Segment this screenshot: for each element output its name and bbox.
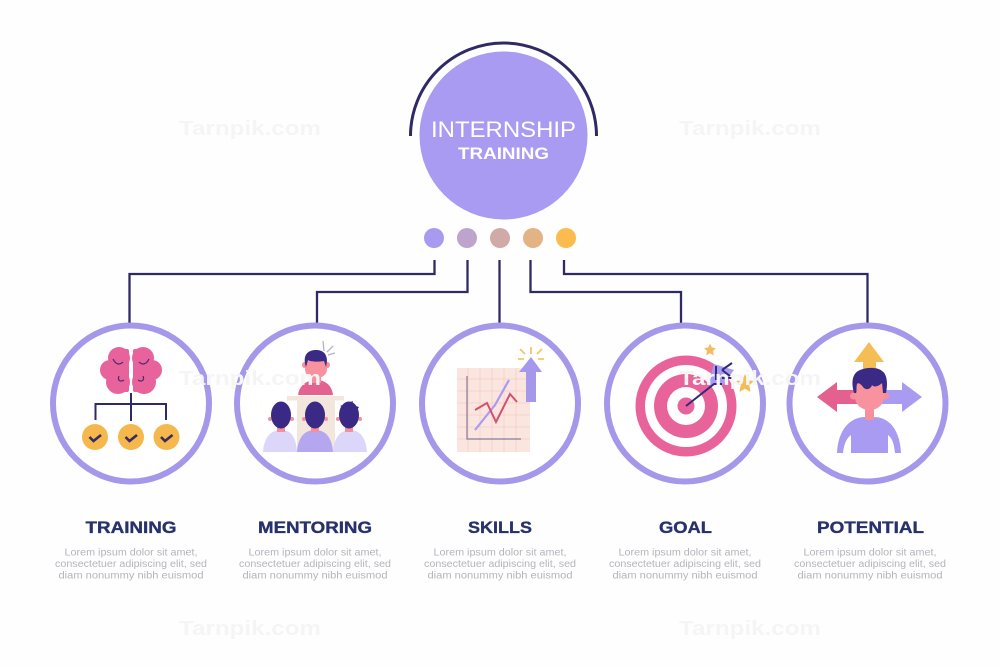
connector lines [130,260,868,323]
skills ring [422,326,578,482]
training ring [53,326,209,482]
watermarks: Tarnpik.com [679,118,821,140]
watermarks: Tarnpik.com [179,368,321,390]
training description: diam nonummy nibh euismod [58,570,204,582]
goal description: diam nonummy nibh euismod [612,570,758,582]
potential description: diam nonummy nibh euismod [798,570,942,582]
mentoring ring [237,326,393,482]
skills description: diam nonummy nibh euismod [428,570,572,582]
title: training: TRAINING [458,144,549,163]
five coloured dots [424,228,576,248]
panel: mentoring [237,326,393,582]
mentoring description: consectetuer adipiscing elit, sed [239,559,391,570]
potential ring [790,326,946,482]
potential description: consectetuer adipiscing elit, sed [794,559,946,570]
header arc [410,43,596,136]
panel: goal [607,326,763,582]
panel: skills [422,326,578,582]
icon: speaker at podium with audience [263,341,367,452]
mentoring description: Lorem ipsum dolor sit amet, [248,548,382,558]
heading: potential: POTENTIAL [817,518,924,537]
panel: potential [790,326,946,582]
watermarks: Tarnpik.com [179,618,321,640]
heading: goal: GOAL [659,518,712,537]
icon: target with arrow and stars [636,344,754,456]
mentoring description: diam nonummy nibh euismod [242,570,388,582]
header: internship training circle [410,43,596,220]
heading: mentoring: MENTORING [258,518,372,537]
header disc [420,52,588,220]
goal ring [607,326,763,482]
training description: Lorem ipsum dolor sit amet, [64,548,198,558]
watermarks [179,118,821,640]
heading: training: TRAINING [86,518,176,537]
watermarks: Tarnpik.com [679,368,821,390]
panel: training [53,326,209,582]
goal description: Lorem ipsum dolor sit amet, [618,548,752,558]
icon: person with three direction arrows [817,342,922,453]
heading: skills: SKILLS [468,518,532,537]
title: internship: INTERNSHIP [431,117,576,142]
skills description: consectetuer adipiscing elit, sed [424,559,576,570]
skills description: Lorem ipsum dolor sit amet, [434,548,566,558]
icon: brain with checklist tree [82,347,180,450]
training description: consectetuer adipiscing elit, sed [55,559,207,570]
icon: growth chart with up arrow [457,347,544,452]
watermarks: Tarnpik.com [679,618,821,640]
goal description: consectetuer adipiscing elit, sed [609,559,761,570]
potential description: Lorem ipsum dolor sit amet, [804,548,936,558]
watermarks: Tarnpik.com [179,118,321,140]
